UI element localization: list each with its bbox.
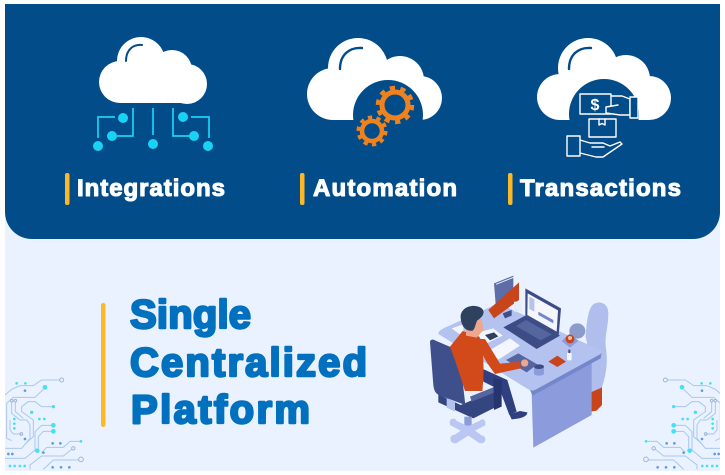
decoration: left circuit pattern [5,378,83,469]
title: Single Centralized Platform: Single [130,293,251,337]
folders [488,276,522,318]
icon: cloud with circuit connections [93,37,213,151]
title: Single Centralized Platform [101,293,367,432]
decoration: right circuit pattern [644,378,722,469]
chair [430,340,500,428]
dollar sign: $ [591,97,600,114]
title: Single Centralized Platform: Platform [131,388,310,432]
desk side panel [532,362,592,448]
label: Automation: Automation [313,175,457,202]
desk items [452,324,578,376]
laptop [503,288,561,349]
title: Single Centralized Platform: Centralized [130,341,367,385]
plant [569,302,608,412]
chair base [450,419,486,443]
label: Transactions: Transactions [520,175,681,202]
icon: cloud with money and package exchange [537,38,671,157]
icon: cloud with gears [307,38,442,150]
illustration: person working at desk [430,276,608,448]
person [450,306,528,419]
panel: navy header [5,4,720,239]
desk edge [529,352,602,396]
desk top [438,303,601,390]
label: Integrations: Integrations [77,175,225,202]
